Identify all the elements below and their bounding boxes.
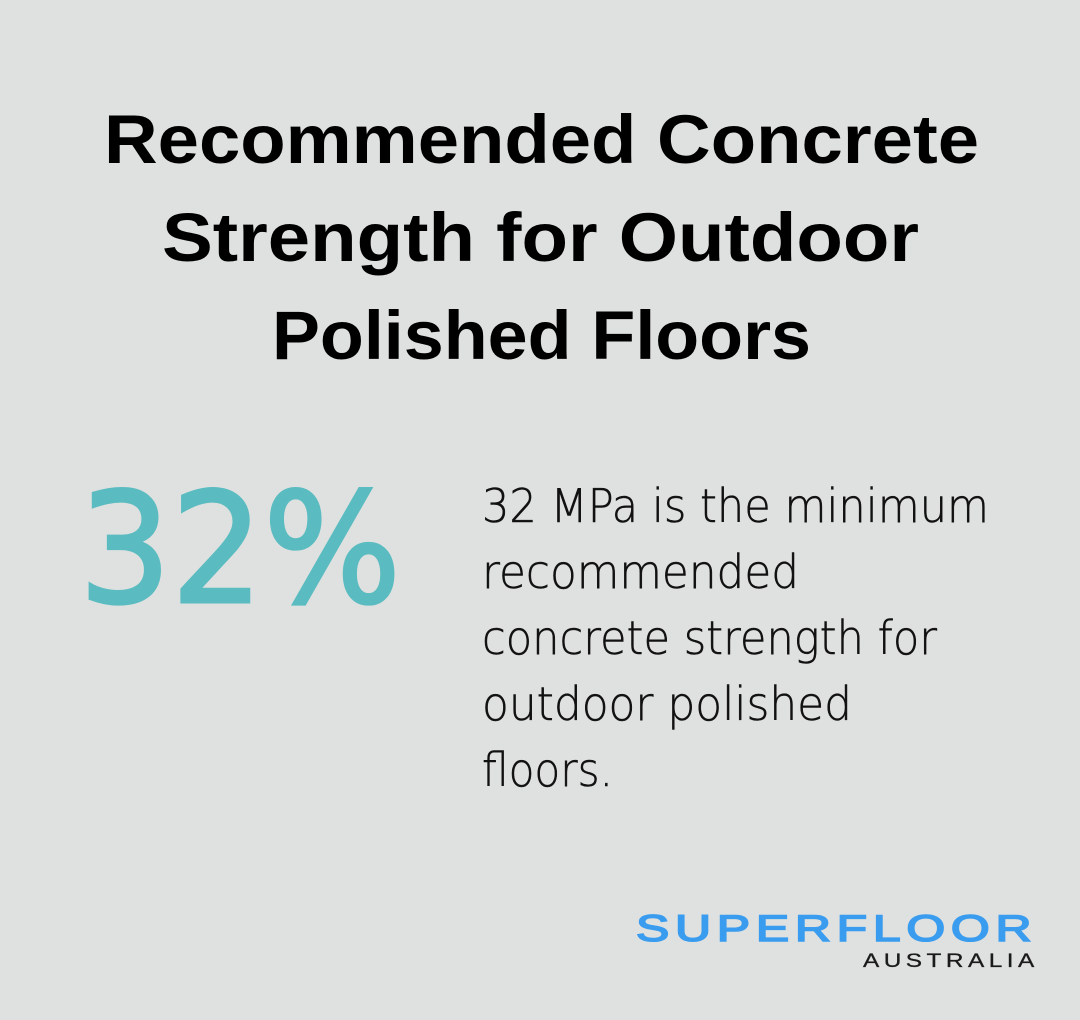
description text: outdoor polished — [482, 677, 852, 731]
title — [104, 101, 979, 374]
title: Strength for Outdoor — [162, 199, 919, 276]
logo: Superfloor Australia: SUPERFLOOR — [636, 908, 1032, 949]
title: Recommended Concrete — [104, 101, 979, 178]
logo: Superfloor Australia: AUSTRALIA — [863, 949, 1035, 971]
description text — [482, 479, 989, 797]
logo: Superfloor Australia — [636, 908, 1035, 971]
description text: floors. — [482, 743, 613, 797]
description text: 32 MPa is the minimum — [482, 479, 989, 533]
title: Polished Floors — [272, 297, 811, 374]
big stat: 32%: 32% — [79, 461, 401, 639]
description text: concrete strength for — [482, 611, 937, 665]
description text: recommended — [482, 545, 799, 599]
